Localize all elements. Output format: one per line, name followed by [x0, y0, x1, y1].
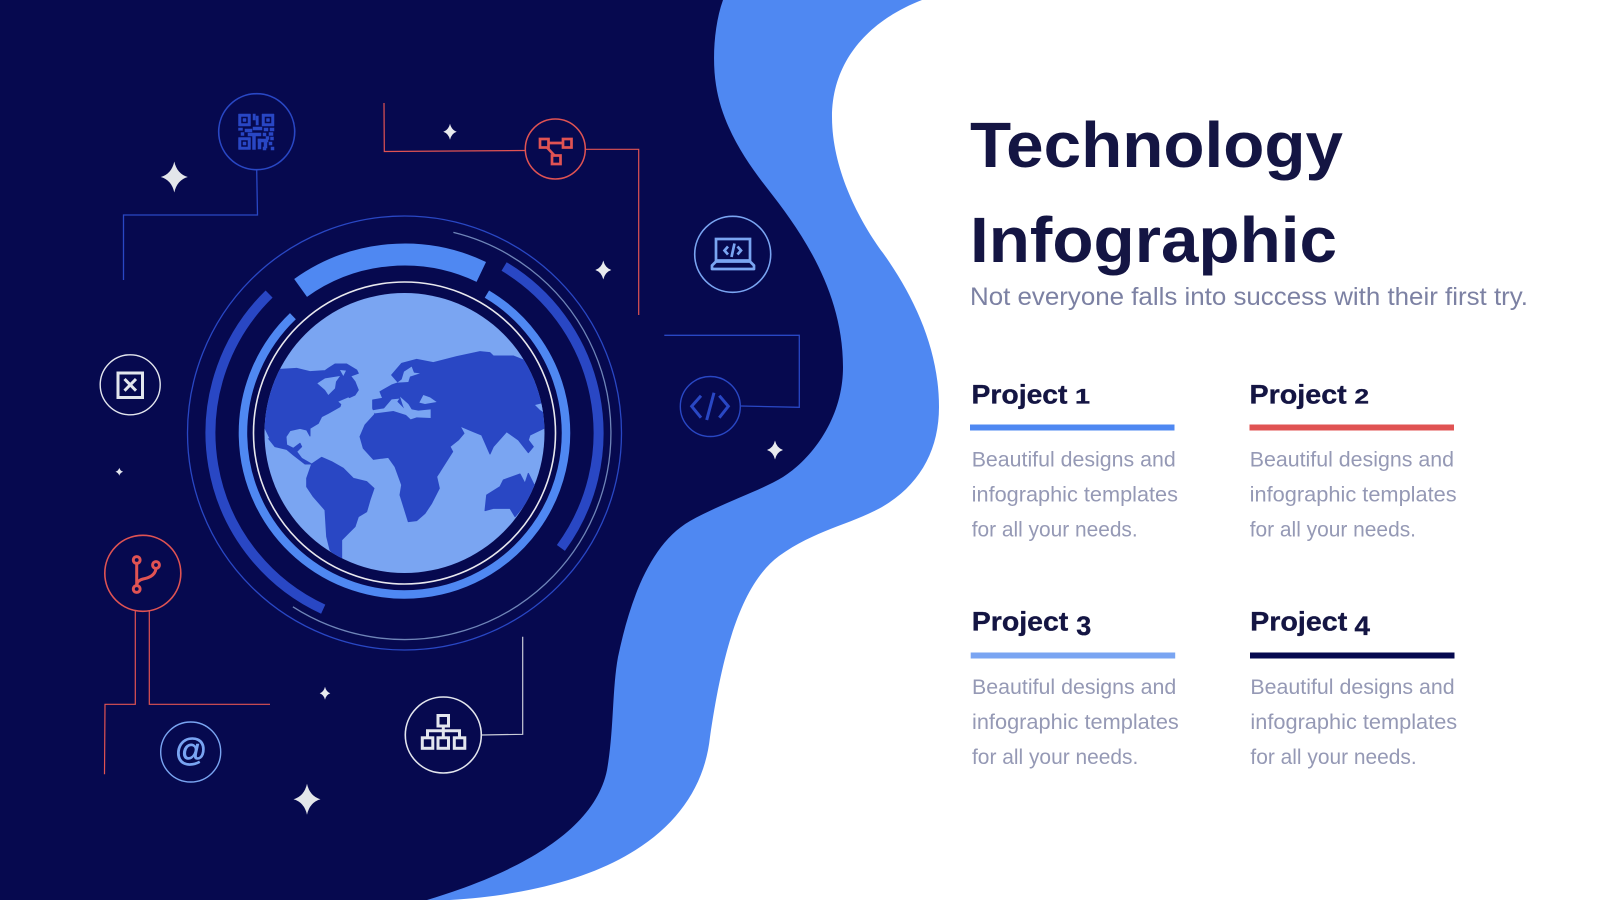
connector: qr code: [124, 170, 258, 280]
icon: at sign: [161, 722, 221, 782]
panel: project 1: [970, 379, 1178, 542]
panel: project 3: [971, 607, 1179, 769]
star: right of globe: [595, 260, 611, 280]
thin grey arc: [293, 232, 611, 640]
body text: infographic templates: [1250, 710, 1457, 734]
rule: [970, 424, 1174, 430]
background: navy wave: [0, 0, 843, 900]
icon: at sign: @: [175, 732, 207, 768]
body text: Beautiful designs and: [1250, 675, 1455, 699]
subtitle: Not everyone falls into success with their first try.: [970, 283, 1528, 311]
connector: org chart: [482, 637, 523, 735]
rule: [971, 652, 1175, 658]
world map: [262, 352, 550, 558]
icon: git branch: [105, 535, 181, 611]
arctic strait: [340, 370, 346, 376]
body text: Beautiful designs and: [972, 448, 1176, 472]
body text: for all your needs.: [972, 745, 1138, 769]
connector: red node right: [586, 149, 639, 315]
inland seas: [263, 367, 545, 438]
white ring: [254, 282, 556, 584]
icon: x box: [100, 355, 160, 415]
body text: infographic templates: [972, 710, 1179, 734]
body text: for all your needs.: [1250, 745, 1417, 769]
star: bottom small: [320, 687, 330, 700]
star: upper left large: [161, 162, 188, 192]
eurasia and africa: [360, 352, 550, 522]
connector: code icon: [664, 335, 799, 407]
inner blue arc: [243, 294, 566, 594]
star: small left: [116, 468, 123, 476]
connector: branch right: [149, 611, 270, 704]
hudson bay: [317, 376, 340, 395]
south america: [307, 457, 374, 558]
globe disc: [264, 293, 544, 573]
background: light blue wave: [0, 0, 939, 900]
body text: Beautiful designs and: [1250, 448, 1454, 472]
title: [970, 109, 1343, 276]
star: lower right: [767, 440, 783, 460]
heading: 1: [1075, 385, 1090, 408]
icon: laptop code: [695, 216, 771, 292]
heading: Project: [1250, 379, 1347, 409]
australia: [485, 473, 537, 517]
icon: org chart: [405, 697, 481, 773]
connector: branch left: [104, 611, 135, 774]
baja: [264, 428, 270, 438]
heading: Project: [972, 607, 1068, 637]
body text: infographic templates: [972, 483, 1178, 507]
baltic: [397, 367, 420, 383]
icon: vector nodes: [525, 119, 585, 179]
gulf of st lawrence: [338, 397, 350, 404]
body text: for all your needs.: [972, 518, 1138, 542]
connector: red node left: [384, 103, 525, 152]
icon: code brackets: [680, 376, 740, 436]
japan sea: [535, 404, 543, 412]
outer thin ring: [188, 216, 622, 650]
north america: [262, 364, 358, 464]
body text: for all your needs.: [1250, 518, 1416, 542]
heading: 4: [1354, 611, 1370, 641]
body text: infographic templates: [1250, 483, 1457, 507]
dark blue arc right: [504, 266, 599, 548]
body text: [1250, 448, 1457, 542]
star: bottom large: [294, 784, 320, 815]
title: Infographic: [970, 204, 1337, 276]
top thick arc: [301, 255, 481, 288]
globe with rings: [188, 216, 622, 650]
panel: project 4: [1250, 607, 1457, 769]
star: top middle: [443, 124, 457, 140]
heading: 3: [1076, 611, 1091, 641]
rule: [1250, 424, 1454, 430]
heading: Project: [972, 379, 1068, 409]
panel: project 2: [1250, 379, 1457, 542]
body text: [1250, 675, 1457, 769]
black sea: [419, 395, 437, 404]
title: Technology: [970, 109, 1343, 181]
body text: Beautiful designs and: [972, 675, 1176, 699]
dark blue arc left: [210, 294, 323, 609]
rule: [1250, 652, 1454, 658]
icon: qr code: [219, 94, 295, 170]
body text: [972, 675, 1179, 769]
heading: 2: [1354, 385, 1369, 408]
mediterranean: [371, 397, 431, 419]
body text: [972, 448, 1178, 542]
heading: Project: [1250, 607, 1347, 637]
